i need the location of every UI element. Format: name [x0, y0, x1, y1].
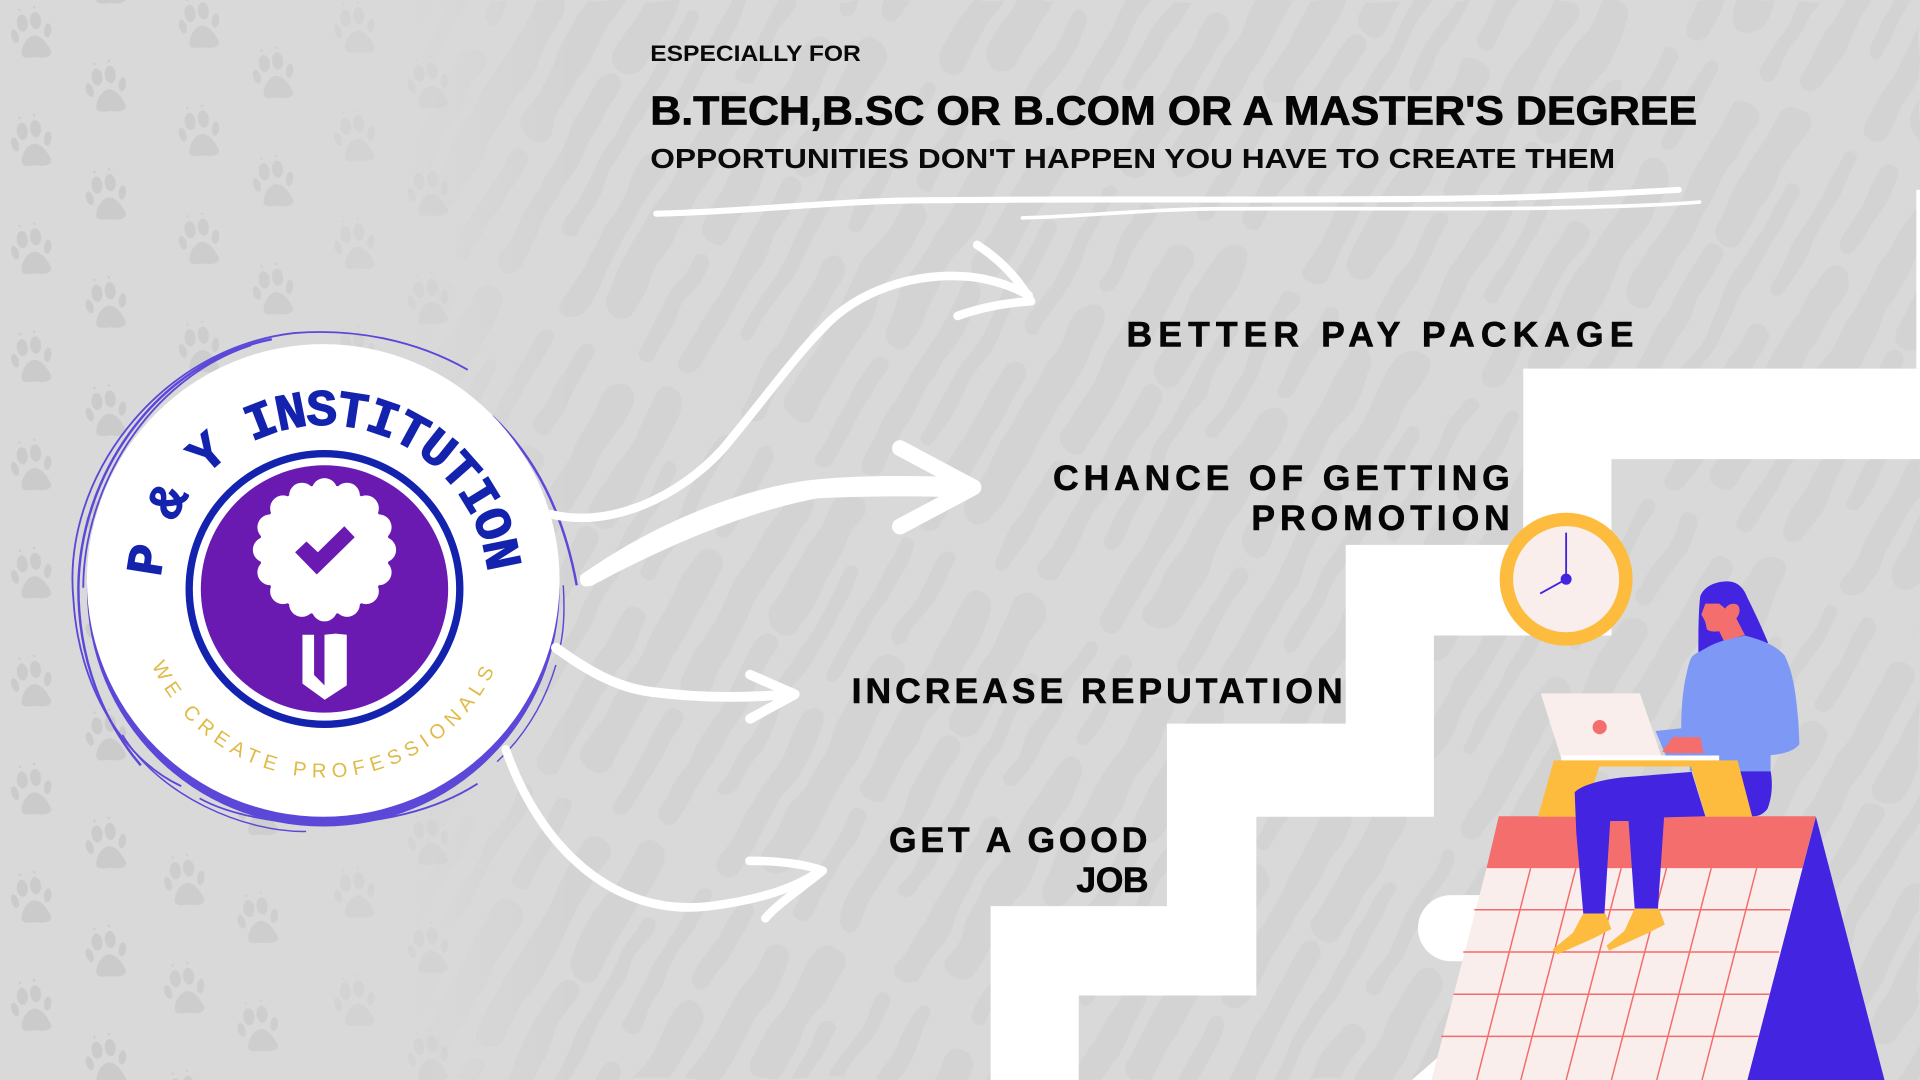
- logo: white disc: [87, 344, 560, 817]
- label: increase reputation: INCREASE REPUTATION: [852, 671, 1343, 711]
- eyebrow text: ESPECIALLY FOR: [650, 41, 861, 66]
- icon: check mark: [295, 526, 355, 575]
- icon: scalloped rosette: [253, 478, 396, 621]
- hand: [1662, 737, 1704, 753]
- label: chance of getting promotion: PROMOTION: [1251, 498, 1510, 538]
- underline strokes: [656, 190, 1700, 218]
- subheading: OPPORTUNITIES DON'T HAPPEN YOU HAVE TO CREATE THEM: [650, 143, 1615, 174]
- calendar: page: [1431, 868, 1802, 1080]
- arrow: to better pay package: [551, 245, 1031, 518]
- label: chance of getting promotion: [1053, 458, 1510, 538]
- arm: [1656, 727, 1690, 756]
- calendar: header: [1487, 816, 1816, 868]
- face: [1701, 604, 1745, 641]
- laptop dot: [1593, 720, 1607, 734]
- staircase: [991, 190, 1920, 1080]
- arrow: to good job: [506, 749, 823, 918]
- logo: purple disc: [201, 465, 448, 713]
- logo: tagline: WE CREATE PROFESSIONALS: [154, 658, 493, 778]
- laptop screen: [1541, 693, 1662, 759]
- paw print pattern: [0, 0, 464, 1080]
- label: chance of getting promotion: CHANCE OF GETTING: [1053, 458, 1510, 498]
- calendar: grid: [1441, 868, 1790, 1080]
- hip: [1714, 771, 1772, 816]
- logo: ring: [189, 454, 460, 724]
- laptop base: [1561, 756, 1719, 761]
- table: [1538, 760, 1752, 817]
- label: better pay package: BETTER PAY PACKAGE: [1127, 315, 1633, 355]
- arrow: to promotion: [580, 448, 973, 587]
- logo badge: [72, 331, 578, 832]
- label: get a good job: JOB: [1076, 860, 1149, 900]
- heading: B.TECH,B.SC OR B.COM OR A MASTER'S DEGREE: [650, 87, 1697, 133]
- hair: [1698, 581, 1768, 653]
- illustration: woman at laptop: [1538, 581, 1799, 954]
- label: get a good job: GET A GOOD: [889, 820, 1147, 860]
- logo: institution name: P & Y INSTITUTION: [126, 390, 522, 575]
- label: get a good job: [889, 820, 1149, 900]
- illustration: calendar: [1431, 816, 1884, 1080]
- shoes: [1553, 909, 1665, 954]
- sweater: [1681, 636, 1799, 771]
- arrow: to reputation: [556, 648, 795, 719]
- icon: ribbon tail: [302, 634, 347, 700]
- logo: sketched purple rings: [72, 332, 577, 831]
- calendar: back triangle: [1747, 817, 1884, 1080]
- legs: [1575, 772, 1705, 913]
- icon: clock: [1506, 519, 1626, 639]
